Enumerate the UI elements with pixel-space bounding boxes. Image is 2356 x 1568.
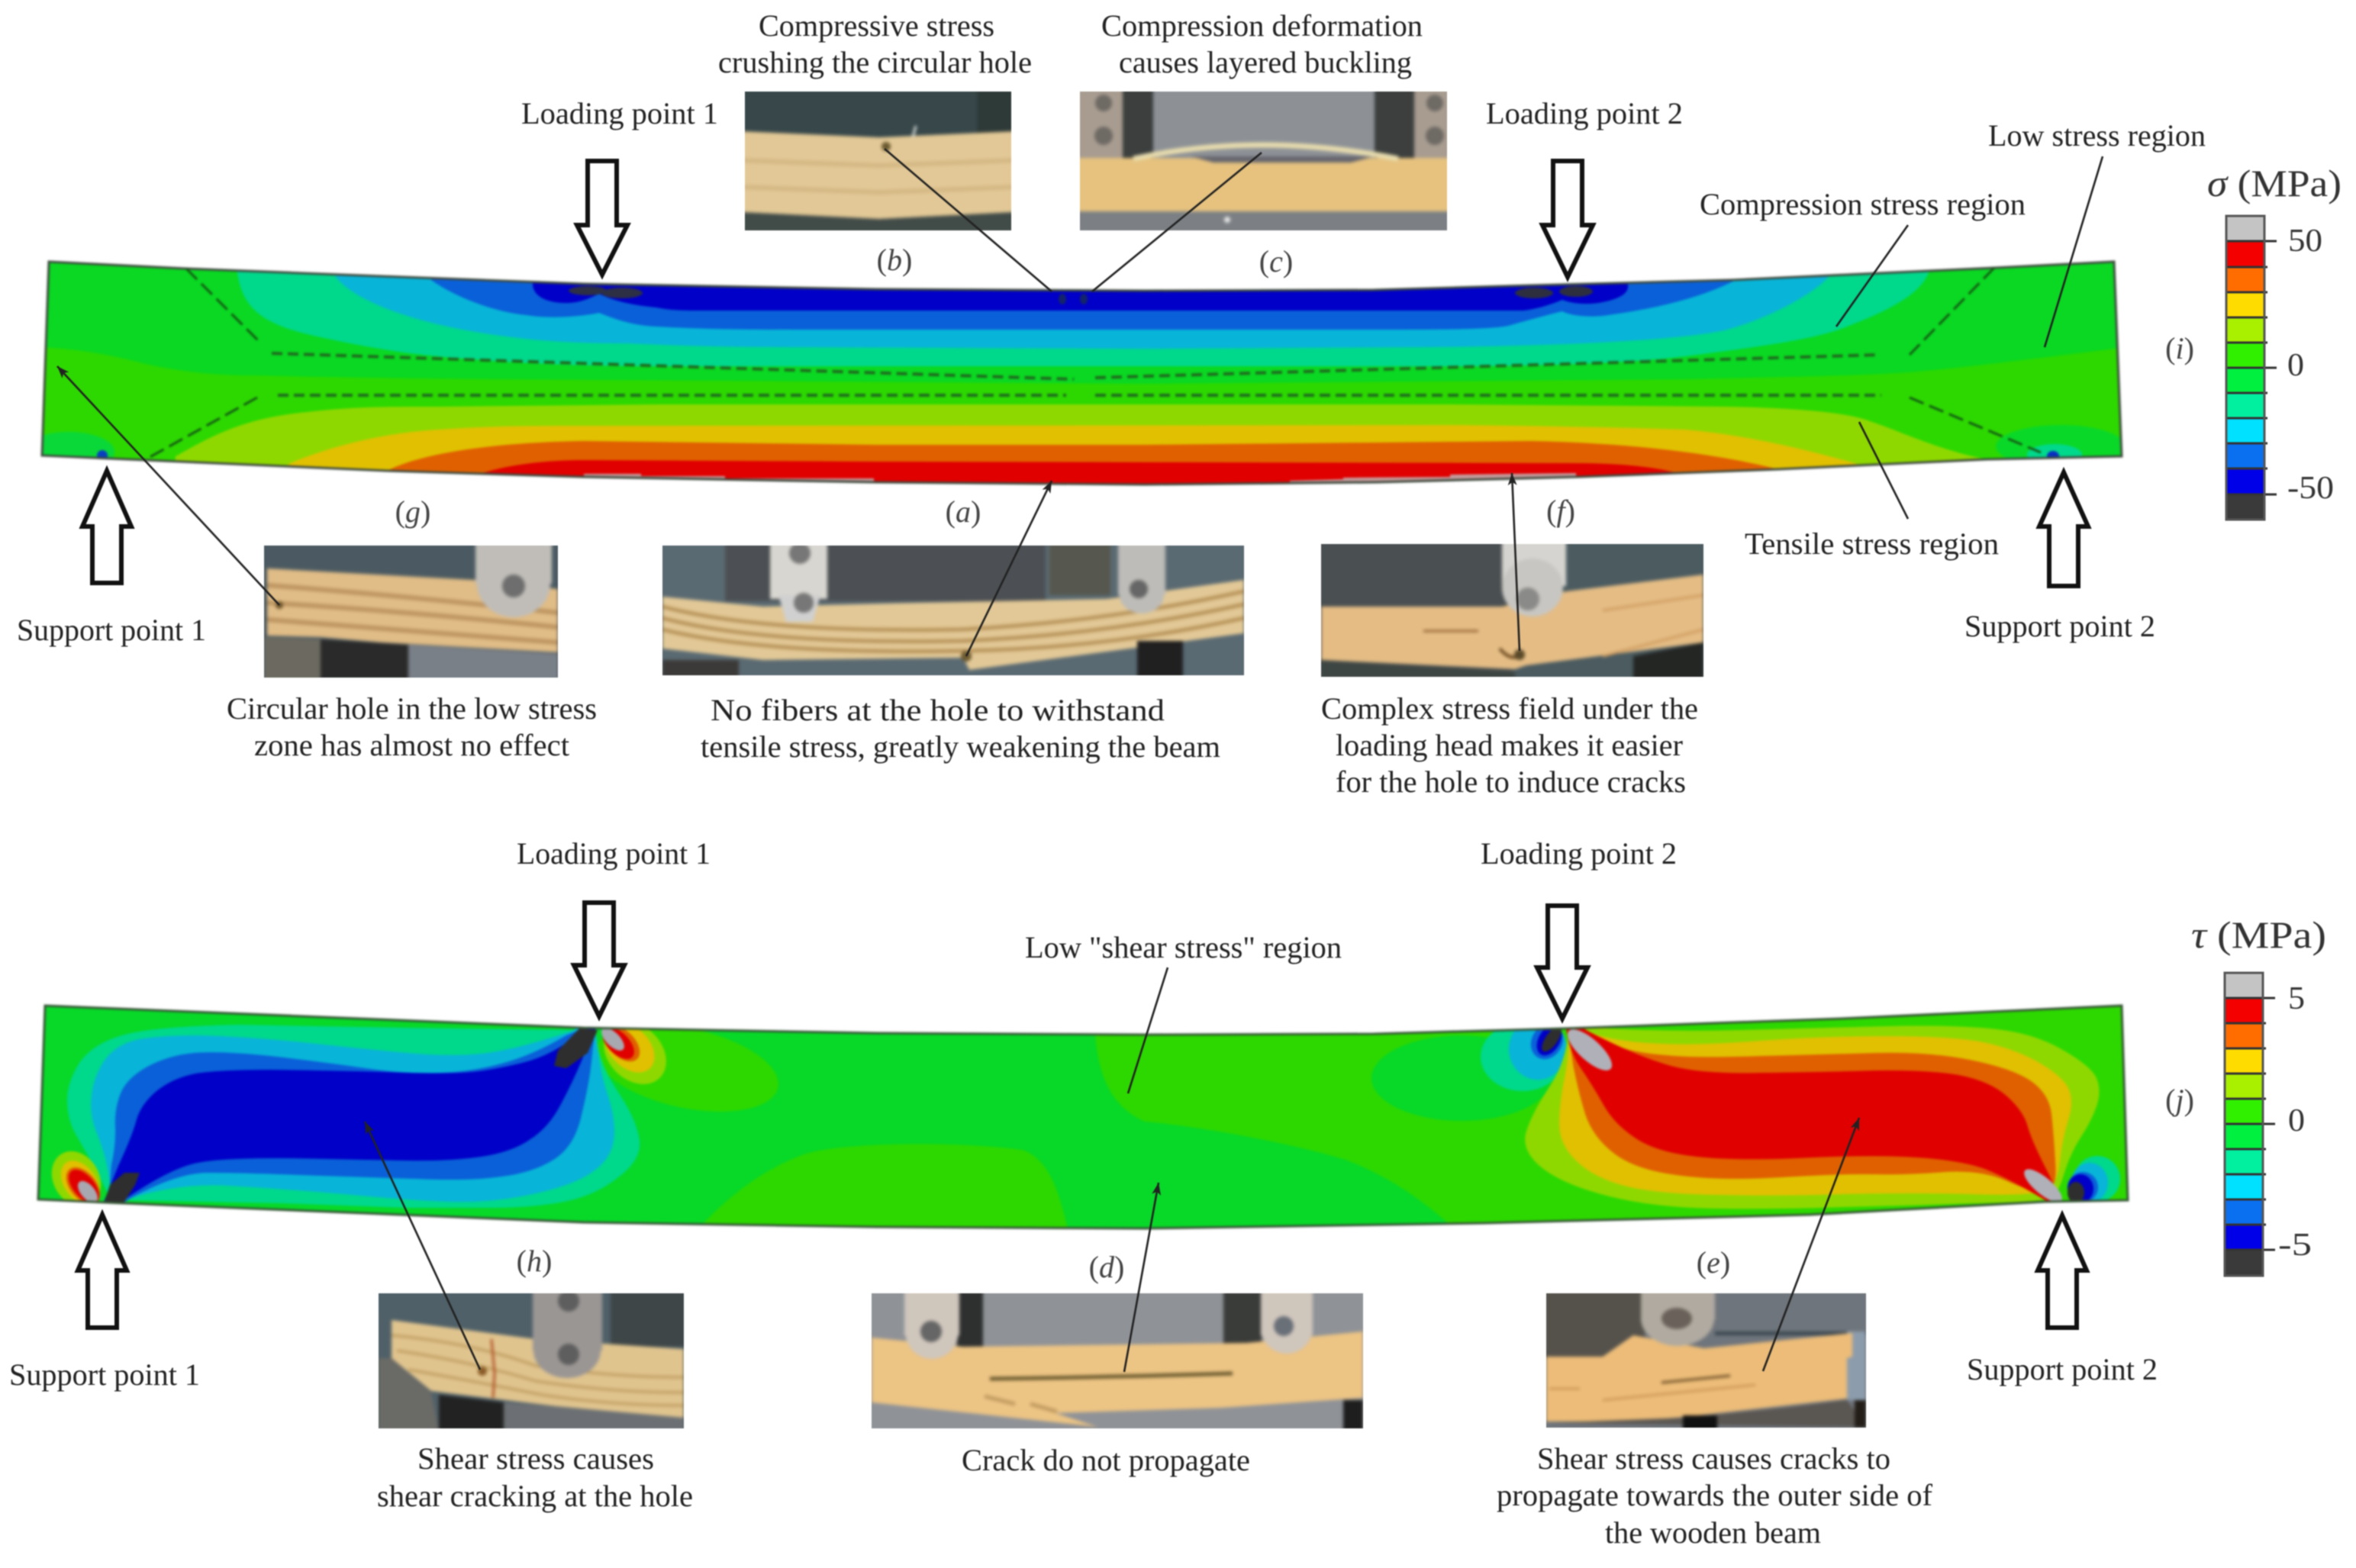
label: loading point 2 bottom: Loading point 2	[1481, 836, 1677, 871]
sub-figure letters: (a)	[946, 494, 981, 529]
tick label -50: -50	[2287, 471, 2334, 506]
label: support point 2 top: Support point 2	[1964, 609, 2155, 643]
label: loading point 1 bottom: Loading point 1	[517, 836, 711, 871]
photo (f): crack under loading head	[1317, 540, 1710, 681]
leader lines: top figure	[57, 149, 2103, 656]
sub-figure letters: (f)	[1546, 494, 1575, 528]
arrow: support point 1 top	[82, 471, 131, 583]
caption: tensile weakening: No fibers at the hole to withstand	[711, 693, 1165, 727]
caption: shear cracking: shear cracking at the hole	[377, 1479, 693, 1513]
colour scale: shear stress	[2225, 973, 2275, 1276]
colour scale: normal stress	[2226, 216, 2277, 520]
caption: low stress zone hole: zone has almost no effect	[254, 728, 569, 762]
label: low shear stress region: Low "shear stress" region	[1025, 930, 1342, 964]
sub-figure letters: (g)	[395, 494, 430, 529]
arrow: support point 1 bottom	[78, 1215, 127, 1328]
caption: shear cracking	[377, 1441, 693, 1513]
sub-figure letters: (c)	[1259, 244, 1293, 279]
colour scale title: sigma: σ (MPa)	[2207, 162, 2341, 204]
sub-figure letters	[395, 243, 2194, 1284]
photo (b): crushed circular hole	[740, 88, 1015, 233]
caption: compressive stress crushing: Compressive stress	[759, 8, 994, 43]
photo (d): crack does not propagate	[866, 1289, 1370, 1434]
caption: shear cracking: Shear stress causes	[417, 1441, 654, 1476]
arrow: loading point 2 top	[1542, 161, 1593, 277]
photo (c): layered buckling	[1076, 88, 1450, 233]
label: low stress region: Low stress region	[1988, 118, 2206, 153]
right load cool spot	[1479, 1029, 1568, 1093]
caption: low stress zone hole	[227, 691, 597, 762]
tick label 5: 5	[2288, 981, 2305, 1016]
sub-figure letters: (i)	[2165, 331, 2194, 365]
arrow: loading point 1 bottom	[574, 903, 624, 1016]
left load hot spot	[597, 1027, 779, 1112]
sub-figure letters: (e)	[1697, 1245, 1730, 1280]
label: support point 1 top: Support point 1	[17, 613, 206, 647]
photo (a): hole on tensile side	[656, 542, 1252, 679]
caption: complex stress field: Complex stress field under the	[1321, 691, 1698, 726]
sub-figure letters: (b)	[877, 243, 912, 277]
label: loading point 2 top: Loading point 2	[1486, 96, 1683, 130]
leader lines: bottom figure	[365, 968, 1859, 1372]
arrow: support point 2 top	[2039, 472, 2088, 586]
sub-figure letters: (j)	[2165, 1083, 2194, 1117]
photo (e): crack propagating outward	[1542, 1289, 1870, 1434]
caption: cracks propagate outward: propagate towards the outer side of	[1497, 1478, 1933, 1512]
caption: compressive stress crushing	[718, 8, 1032, 79]
caption: tensile weakening	[701, 693, 1220, 764]
arrow: loading point 1 top	[577, 161, 627, 275]
colour scale title: tau: τ (MPa)	[2191, 913, 2326, 956]
label: support point 1 bottom: Support point 1	[9, 1357, 200, 1392]
label: tensile stress region: Tensile stress region	[1745, 526, 1999, 561]
caption: crack do not propagate: Crack do not propagate	[962, 1443, 1250, 1477]
caption: low stress zone hole: Circular hole in the low stress	[227, 691, 597, 726]
caption: compressive stress crushing: crushing the circular hole	[718, 45, 1032, 79]
panel: shear stress contour beam (j)	[35, 1003, 2131, 1232]
caption: complex stress field: for the hole to induce cracks	[1336, 765, 1686, 799]
label: compression stress region: Compression stress region	[1700, 187, 2026, 221]
sub-figure letters: (d)	[1089, 1250, 1124, 1284]
tick label 50: 50	[2288, 224, 2322, 259]
caption: cracks propagate outward	[1497, 1441, 1933, 1550]
arrow: support point 2 bottom	[2038, 1215, 2087, 1328]
tick label 0: 0	[2287, 348, 2304, 383]
photo (h): shear cracking at hole	[374, 1289, 687, 1434]
caption: complex stress field	[1321, 691, 1698, 799]
caption: compression deformation: Compression deformation	[1101, 8, 1423, 43]
label: loading point 1 top: Loading point 1	[521, 96, 718, 130]
label: support point 2 bottom: Support point 2	[1967, 1352, 2158, 1386]
sub-figure letters: (h)	[517, 1244, 552, 1278]
caption: cracks propagate outward: Shear stress causes cracks to	[1537, 1441, 1890, 1476]
tick label -5: -5	[2278, 1228, 2312, 1263]
caption: complex stress field: loading head makes it easier	[1336, 728, 1683, 762]
caption: compression deformation	[1101, 8, 1423, 79]
caption: compression deformation: causes layered buckling	[1119, 45, 1412, 79]
arrow: loading point 2 bottom	[1537, 906, 1587, 1019]
tick label 0: 0	[2288, 1103, 2305, 1138]
photo (g): hole in low stress zone	[259, 542, 561, 683]
caption: tensile weakening: tensile stress, greatly weakening the beam	[701, 729, 1220, 764]
region boundaries: dashed lines	[146, 268, 2041, 459]
caption: cracks propagate outward: the wooden beam	[1605, 1515, 1821, 1550]
panel: normal stress contour beam (i)	[39, 259, 2125, 488]
